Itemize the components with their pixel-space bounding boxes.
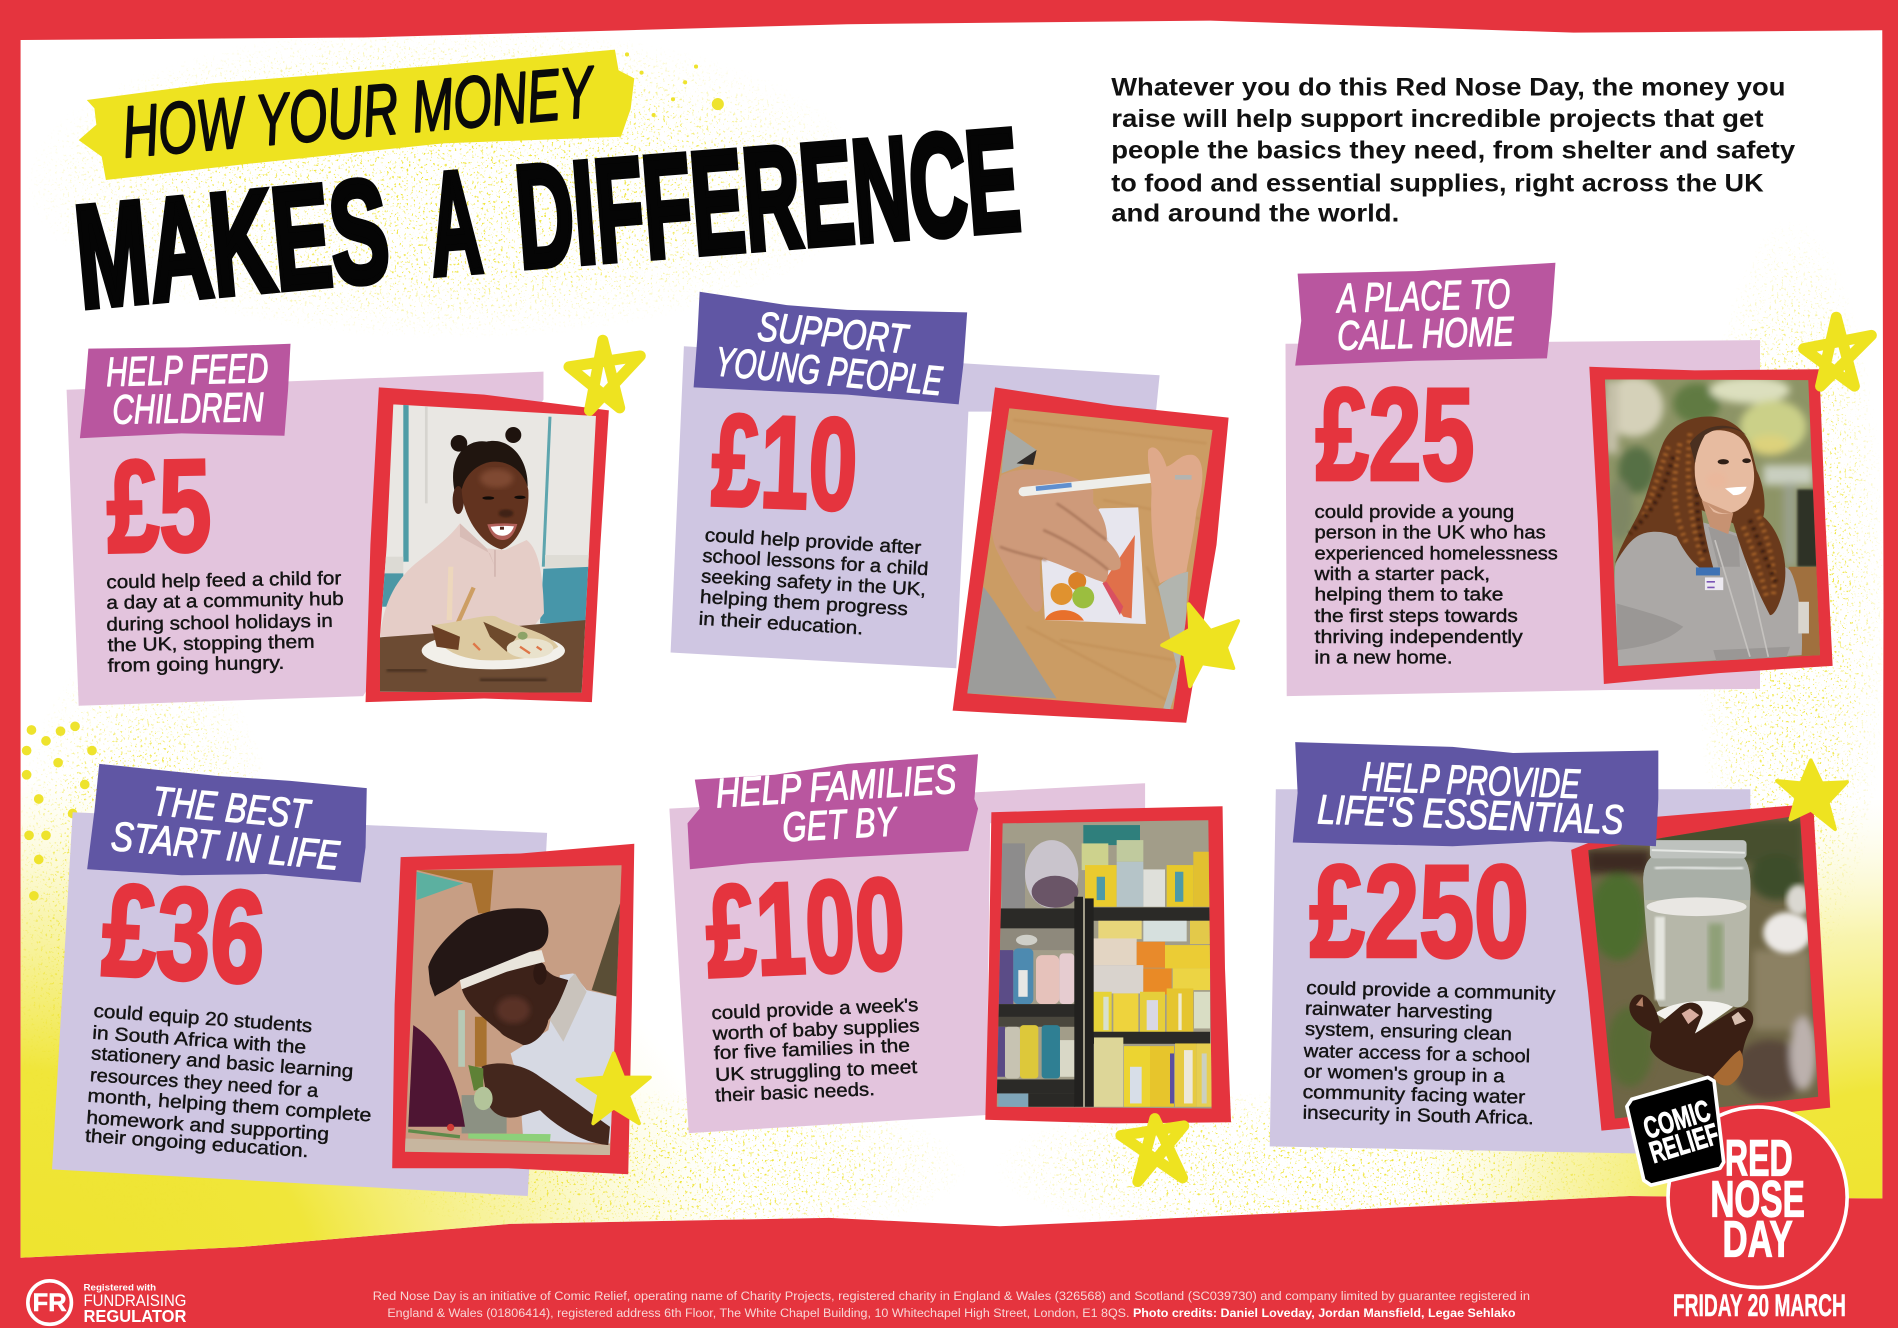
description: the UK, stopping them [107, 631, 315, 655]
icon: star outline [1804, 317, 1871, 386]
label: help provide life's essentials: LIFE'S ESSENTIALS [1317, 786, 1624, 843]
comic relief badge: RELIEF [1646, 1118, 1723, 1170]
intro paragraph: to food and essential supplies, right across the UK [1111, 169, 1764, 197]
label: help provide life's essentials: HELP PROVIDE [1361, 754, 1581, 807]
title: how your money makes a difference [69, 50, 1025, 338]
description: community facing water [1302, 1081, 1526, 1107]
yellow title banner [79, 50, 634, 180]
description: could help provide after [704, 524, 922, 558]
description [84, 1000, 372, 1161]
label: a place to call home [1295, 263, 1555, 366]
amount £250: £250 [1310, 838, 1529, 984]
label: help feed children: CHILDREN [112, 384, 264, 433]
label: the best start in life [87, 764, 367, 883]
description: homework and supporting [86, 1106, 330, 1144]
description: school lessons for a child [702, 545, 929, 579]
description: or women's group in a [1304, 1060, 1506, 1086]
logo: fundraising regulator: Registered with [84, 1282, 157, 1292]
heading line two: DIFFERENCE [510, 97, 1025, 298]
label: help provide life's essentials [1293, 742, 1658, 846]
icon: star outline [1121, 1119, 1184, 1182]
description: worth of baby supplies [711, 1015, 920, 1044]
description: stationery and basic learning [91, 1042, 354, 1082]
description: month, helping them complete [87, 1085, 372, 1125]
description: water access for a school [1302, 1040, 1530, 1066]
intro paragraph: and around the world. [1111, 200, 1399, 228]
logo: fundraising regulator [28, 1281, 187, 1326]
label: support young people: YOUNG PEOPLE [713, 338, 944, 404]
red nose day roundel [1668, 1107, 1847, 1287]
description: in South Africa with the [92, 1022, 307, 1058]
logo: fundraising regulator: FUNDRAISING [84, 1292, 186, 1310]
label: the best start in life: START IN LIFE [109, 813, 342, 879]
description: the first steps towards [1315, 605, 1518, 626]
intro paragraph: Whatever you do this Red Nose Day, the money you [1111, 74, 1785, 102]
description [1302, 977, 1556, 1128]
photo: child's hands drawing [953, 387, 1229, 723]
heading line two [69, 97, 1025, 338]
comic relief badge [1627, 1077, 1724, 1185]
panel: help families get by £100 [669, 754, 1231, 1182]
label: support young people: SUPPORT [756, 303, 911, 362]
comic relief badge: COMIC [1640, 1094, 1714, 1146]
intro paragraph: raise will help support incredible projects that get [1111, 105, 1764, 133]
label: help feed children [80, 344, 291, 438]
description: with a starter pack, [1313, 563, 1490, 584]
label: help families get by: HELP FAMILIES [714, 756, 958, 816]
description: a day at a community hub [106, 588, 344, 613]
description: their ongoing education. [84, 1125, 309, 1161]
description: person in the UK who has [1315, 522, 1546, 543]
label: help families get by [688, 754, 978, 869]
amount £10: £10 [710, 387, 860, 538]
icon: star outline [569, 340, 640, 410]
amount £36: £36 [99, 857, 269, 1011]
red nose day wordmark [1710, 1129, 1805, 1268]
amount £25: £25 [1316, 361, 1474, 507]
footer legal text: Red Nose Day is an initiative of Comic Relief, operating name of Charity Projects, registered charity in England & Wales (326568) and Scotland (SC039730) and company limited by guarantee registered in [373, 1289, 1530, 1303]
description: helping them to take [1315, 583, 1503, 604]
heading line two: MAKES [69, 148, 395, 338]
description: could equip 20 students [93, 1000, 313, 1036]
description [711, 994, 920, 1106]
icon: star filled [1162, 604, 1238, 686]
description: thriving independently [1315, 626, 1523, 647]
label: support young people [694, 292, 967, 404]
description: UK struggling to meet [715, 1056, 918, 1085]
amount £5: £5 [106, 432, 212, 580]
description: insecurity in South Africa. [1302, 1102, 1534, 1128]
amount £100: £100 [703, 850, 908, 1005]
description: could provide a community [1306, 977, 1556, 1004]
intro paragraph [1111, 74, 1795, 228]
description: their basic needs. [715, 1078, 875, 1106]
description: for five families in the [713, 1034, 910, 1063]
logo: fundraising regulator: REGULATOR [84, 1306, 187, 1326]
intro paragraph: people the basics they need, from shelter and safety [1111, 137, 1795, 165]
footer legal text: England & Wales (01806414), registered address 6th Floor, The White Chapel Building, 10 Whitechapel High Street, London, E1 8QS. Photo credits: Daniel Loveday, Jordan Mansfield, Legae Sehlako [387, 1306, 1515, 1320]
heading line one: HOW YOUR MONEY [119, 51, 599, 173]
photo: young woman smiling [1589, 367, 1833, 684]
red nose day wordmark: DAY [1722, 1211, 1793, 1268]
description: resources they need for a [89, 1064, 320, 1101]
description: helping them progress [699, 586, 908, 619]
footer legal text [373, 1289, 1530, 1320]
description: rainwater harvesting [1305, 997, 1493, 1023]
panel: help feed children £5 [67, 340, 640, 706]
description: during school holidays in [106, 610, 333, 635]
label: a place to call home: A PLACE TO [1334, 271, 1511, 321]
description: from going hungry. [107, 652, 285, 676]
red nose day wordmark: RED [1725, 1129, 1793, 1186]
icon: star filled [577, 1053, 650, 1123]
label: the best start in life: THE BEST [151, 778, 314, 838]
panel: support young people £10 [671, 292, 1238, 723]
description: system, ensuring clean [1305, 1018, 1512, 1044]
description: seeking safety in the UK, [701, 565, 927, 600]
panel: help provide life's essentials £250 [1270, 742, 1847, 1154]
description: could provide a young [1315, 501, 1514, 522]
logo: red nose day with comic relief badge [1627, 1077, 1847, 1323]
panel: a place to call home £25 [1286, 263, 1871, 696]
description [1313, 501, 1558, 667]
logo: fundraising regulator: FR [33, 1289, 67, 1317]
photo: shelves of baby supplies [985, 806, 1231, 1123]
label: a place to call home: CALL HOME [1337, 308, 1515, 359]
description [106, 567, 344, 676]
description: in their education. [698, 608, 864, 638]
description: could help feed a child for [106, 567, 341, 592]
photo: hand holding jar of water [1571, 804, 1830, 1131]
description: could provide a week's [711, 994, 919, 1023]
icon: star filled [1777, 760, 1847, 829]
description [698, 524, 929, 638]
label: help families get by: GET BY [781, 798, 899, 850]
description: in a new home. [1315, 646, 1453, 667]
label: help feed children: HELP FEED [106, 345, 269, 395]
panel: the best start in life £36 [52, 764, 650, 1196]
photo: girl eating a meal [366, 387, 609, 702]
red nose day wordmark: NOSE [1710, 1171, 1805, 1228]
photo: girl with a leaf [392, 844, 634, 1174]
heading line two: A [423, 139, 486, 306]
description: experienced homelessness [1315, 542, 1558, 563]
